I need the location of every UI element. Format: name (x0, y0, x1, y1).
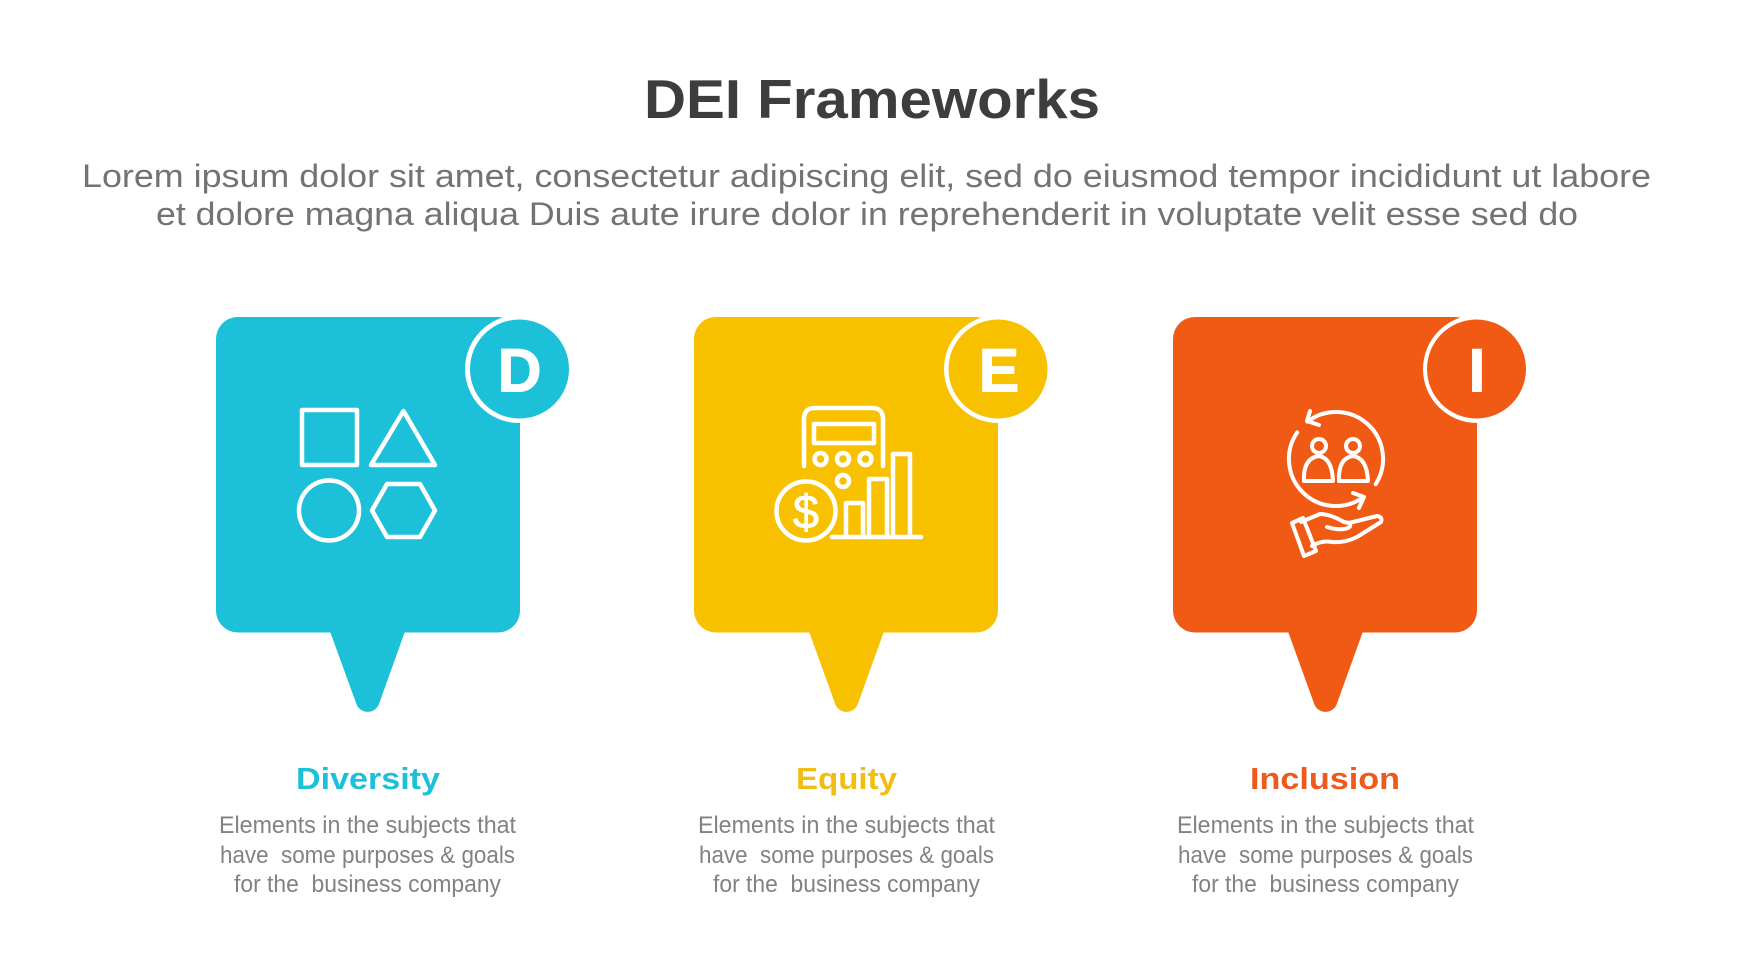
description: inclusion: for the business company (1192, 871, 1459, 898)
badge: D: D (497, 336, 542, 404)
subtitle text block: Lorem ipsum dolor sit amet, consectetur adipiscing elit, sed do eiusmod tempor incididunt ut labore (82, 158, 1651, 194)
speech bubble: equity (694, 317, 998, 712)
subtitle text block: et dolore magna aliqua Duis aute irure dolor in reprehenderit in voluptate velit esse sed do (156, 196, 1578, 232)
badge: I (1423, 315, 1531, 423)
icon: calculator, coin and bars (776, 408, 921, 540)
heading: inclusion: Inclusion (1250, 761, 1400, 796)
subtitle text block (82, 158, 1651, 232)
title: DEI Frameworks (644, 68, 1100, 130)
icon: shapes (299, 410, 435, 540)
description: diversity: have some purposes & goals (220, 842, 515, 869)
description: diversity: for the business company (234, 871, 501, 898)
badge: I: I (1469, 336, 1485, 404)
speech bubble: inclusion (1173, 317, 1477, 712)
description: inclusion (1177, 812, 1474, 898)
heading: equity: Equity (796, 761, 898, 796)
description: equity: have some purposes & goals (699, 842, 994, 869)
badge: E (944, 315, 1052, 423)
description: equity (698, 812, 995, 898)
icon: calculator, coin and bars: $ (793, 485, 819, 538)
icon: people cycle and hand (1289, 411, 1383, 556)
description: equity: for the business company (713, 871, 980, 898)
badge: D (465, 315, 573, 423)
description: equity: Elements in the subjects that (698, 812, 995, 839)
panel: equity (694, 315, 1052, 898)
description: diversity: Elements in the subjects that (219, 812, 516, 839)
speech bubble: diversity (216, 317, 520, 712)
description: inclusion: have some purposes & goals (1178, 842, 1473, 869)
description: diversity (219, 812, 516, 898)
heading: diversity: Diversity (296, 761, 441, 796)
panel: diversity (216, 315, 573, 898)
description: inclusion: Elements in the subjects that (1177, 812, 1474, 839)
panel: inclusion (1173, 315, 1531, 898)
badge: E: E (979, 336, 1019, 404)
